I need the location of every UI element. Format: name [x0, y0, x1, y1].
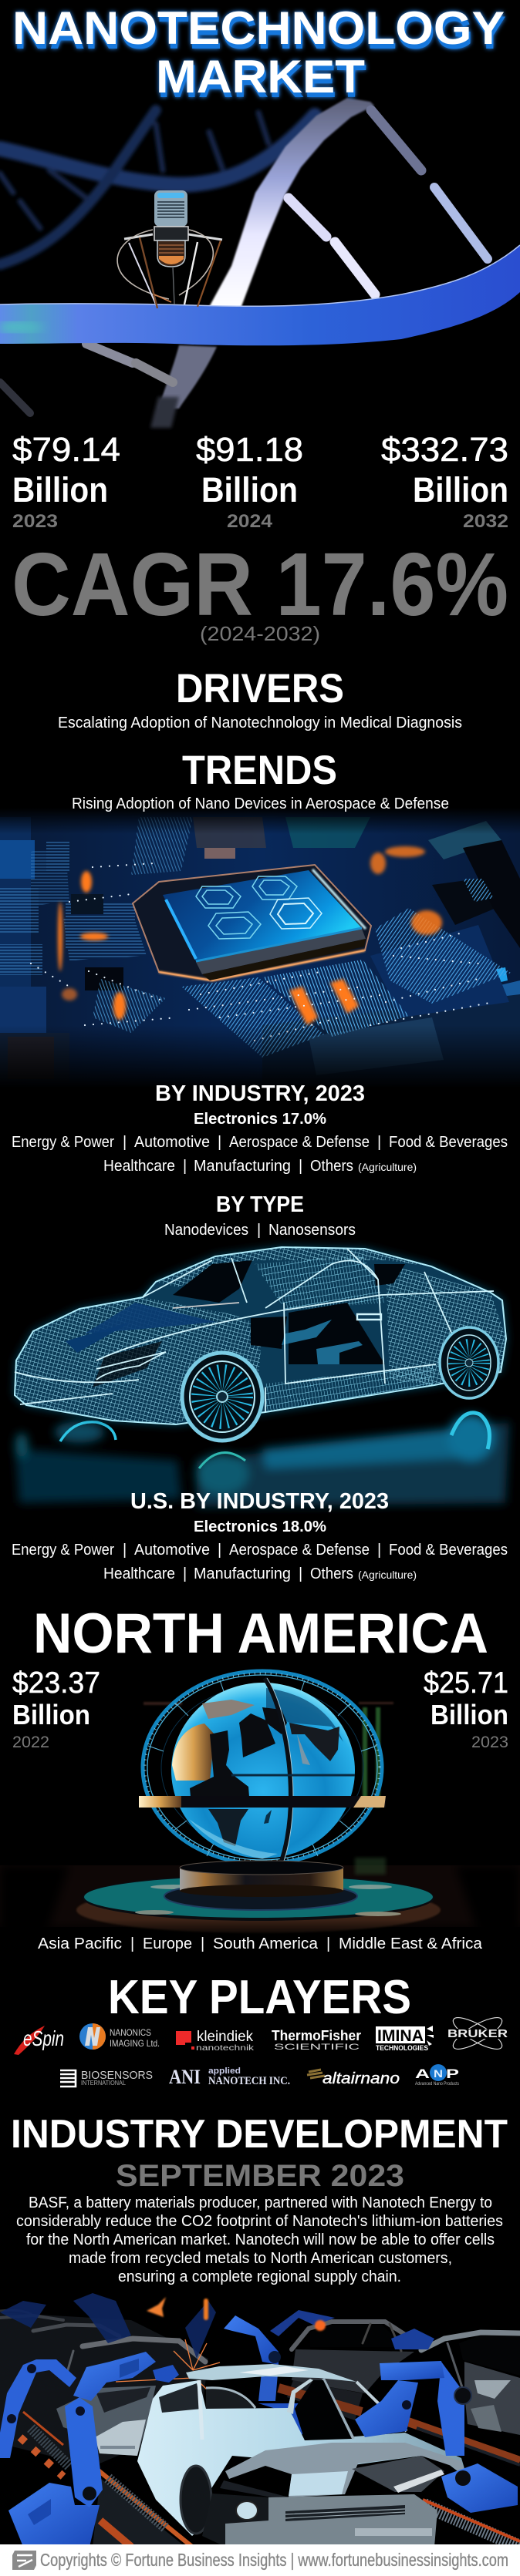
stat 2032 — [381, 431, 508, 532]
logo: eSpin — [14, 2026, 64, 2055]
U.S. industry segments: | — [218, 1542, 221, 1559]
stat 2024: 2024 — [227, 511, 273, 532]
stat 2032: $332.73 — [381, 431, 508, 469]
car seats — [282, 1320, 363, 1364]
development description: made from recycled metals to North American customers, — [69, 2250, 452, 2267]
rear wheel — [440, 1327, 498, 1398]
gold lit land — [172, 1723, 214, 1781]
industry segments: | — [183, 1158, 187, 1175]
logo: kleindiek: nanotechnik — [196, 2044, 255, 2053]
logo: Thermo Fisher: SCIENTIFIC — [274, 2043, 360, 2052]
U.S. industry segments: Manufacturing — [194, 1565, 291, 1582]
globe image — [0, 1671, 520, 1938]
U.S. industry segments: | — [377, 1542, 381, 1559]
lavender strand — [208, 98, 374, 308]
rails — [20, 2388, 520, 2547]
U.S. industry segments: Healthcare — [103, 1565, 175, 1582]
industry segments: Healthcare — [103, 1158, 175, 1175]
logo: Nanonics: NANONICS — [110, 2027, 151, 2038]
key player logos — [14, 2012, 509, 2088]
car roof and pillars — [186, 2364, 407, 2440]
development description: for the North American market. Nanotech will now be able to offer cells — [26, 2231, 495, 2248]
trends — [72, 748, 449, 812]
lower strand fading — [158, 345, 217, 409]
other regions: Middle East & Africa — [339, 1935, 483, 1952]
logo: Applied Nanotech: ANI — [169, 2066, 201, 2088]
North America value 2022: 2022 — [12, 1734, 49, 1751]
reflection — [15, 1414, 509, 1507]
stat 2024: Billion — [201, 470, 298, 509]
by industry 2023: Electronics 17.0% — [194, 1111, 326, 1128]
logo: ANP: A — [415, 2067, 430, 2081]
logo: Applied Nanotech: NANOTECH INC. — [208, 2075, 290, 2087]
by type: BY TYPE — [216, 1192, 304, 1217]
by type: | — [257, 1222, 261, 1239]
logo: Nanonics — [79, 2023, 160, 2050]
dim background data panels — [144, 1702, 393, 1808]
industry segments: Manufacturing — [194, 1158, 291, 1175]
by type: Nanodevices — [164, 1222, 248, 1239]
circuit trace fields — [31, 817, 511, 1058]
North America value 2023: 2023 — [471, 1734, 508, 1751]
North America value 2023 — [424, 1666, 508, 1751]
logo: ANP — [415, 2064, 459, 2087]
development description — [16, 2194, 503, 2285]
stat 2024 — [196, 431, 303, 532]
logo: Fortune Business Insights — [12, 2551, 36, 2570]
U.S. industry segments: (Agriculture) — [358, 1569, 417, 1581]
pedestal — [164, 1882, 357, 1910]
chip image — [0, 808, 520, 1088]
logo: Applied Nanotech: applied — [208, 2067, 241, 2076]
by type: Nanosensors — [268, 1222, 356, 1239]
rungs — [0, 110, 488, 413]
industry segments: Aerospace & Defense — [229, 1134, 370, 1151]
sphere — [171, 1683, 355, 1858]
sparks — [147, 2297, 326, 2331]
car body — [15, 1247, 506, 1424]
development description: considerably reduce the CO2 footprint of Nanotech's lithium-ion batteries — [16, 2213, 503, 2230]
wheel arch — [181, 2466, 211, 2534]
other regions: Asia Pacific — [38, 1935, 122, 1952]
horizontal glow line — [143, 1777, 382, 1779]
North America value 2022 — [12, 1666, 100, 1751]
nano robot — [117, 190, 222, 308]
front wheel — [182, 1353, 262, 1441]
car dark openings — [66, 1260, 405, 1387]
industry segments: Others — [310, 1158, 353, 1175]
hero image: DNA strand with nano robot — [0, 98, 520, 428]
logo: Biosensors: INTERNATIONAL — [81, 2080, 126, 2087]
logo: Bruker: BRUKER — [447, 2027, 508, 2040]
continents — [190, 1707, 339, 1846]
U.S. industry segments: Food & Beverages — [389, 1542, 508, 1559]
logo: kleindiek — [176, 2029, 255, 2053]
platform — [76, 1887, 441, 1933]
background cars — [0, 2310, 520, 2467]
logo: Applied Nanotech — [169, 2066, 290, 2088]
industry development heading: INDUSTRY DEVELOPMENT — [11, 2112, 508, 2157]
development description: BASF, a battery materials producer, partnered with Nanotech Energy to — [29, 2194, 492, 2211]
chip octagons — [196, 876, 322, 939]
other regions: South America — [213, 1935, 319, 1952]
North America value 2023: $25.71 — [424, 1666, 508, 1700]
industry segments: | — [123, 1134, 127, 1151]
logo: Biosensors — [60, 2069, 153, 2087]
drivers: Escalating Adoption of Nanotechnology in Medical Diagnosis — [58, 715, 462, 731]
logo: Bruker — [446, 2012, 509, 2055]
second car shell — [56, 2386, 255, 2456]
logo: Thermo Fisher — [272, 2028, 361, 2052]
market size stats — [12, 431, 508, 532]
other regions: | — [130, 1935, 134, 1952]
U.S. industry segments — [12, 1542, 508, 1582]
industry segments: (Agriculture) — [358, 1161, 417, 1173]
North America value 2022: $23.37 — [12, 1666, 100, 1700]
outer ring — [143, 1671, 382, 1864]
industry segments: | — [299, 1158, 302, 1175]
logo: Altairnano: altairnano — [322, 2070, 400, 2087]
North America value 2022: Billion — [12, 1699, 90, 1730]
industry segments — [12, 1134, 508, 1175]
orange glows — [58, 846, 442, 1025]
U.S. by industry 2023: Electronics 18.0% — [194, 1518, 326, 1535]
board components — [0, 817, 520, 1082]
title: MARKET — [156, 51, 365, 103]
U.S. industry segments: Energy & Power — [12, 1542, 114, 1559]
logo: Nanonics: IMAGING Ltd. — [110, 2038, 160, 2049]
logo: Imina — [376, 2026, 434, 2053]
blue main strand — [0, 245, 520, 345]
blue robots back — [0, 2293, 434, 2435]
logo: ANP: Advanced Nano Products — [415, 2082, 459, 2087]
drivers — [58, 666, 462, 731]
title: NANOTECHNOLOGY — [12, 2, 505, 54]
front bumper — [202, 2494, 437, 2547]
logo: Biosensors: BIOSENSORS — [81, 2069, 153, 2082]
logo: ANP: P — [446, 2067, 459, 2081]
trends: TRENDS — [182, 748, 337, 793]
industry segments: Energy & Power — [12, 1134, 114, 1151]
factory image — [0, 2293, 520, 2547]
stat 2023: $79.14 — [12, 431, 120, 469]
other regions: | — [326, 1935, 330, 1952]
stat 2032: Billion — [413, 470, 508, 509]
chip outer frame — [133, 865, 371, 980]
outer glow — [15, 1247, 506, 1424]
other regions — [38, 1935, 483, 1952]
U.S. industry segments: Others — [310, 1565, 353, 1582]
logo: kleindiek: kleindiek — [197, 2029, 253, 2045]
vertical meridian ring — [265, 1678, 291, 1871]
key players heading: KEY PLAYERS — [108, 1971, 411, 2024]
by industry 2023 — [12, 1081, 508, 1175]
U.S. industry segments: | — [299, 1565, 302, 1582]
logo: Thermo Fisher: ThermoFisher — [272, 2028, 361, 2043]
logo: ANP: N — [434, 2067, 443, 2080]
logo: Imina: TECHNOLOGIES — [376, 2044, 428, 2053]
solder dots — [31, 863, 494, 1041]
U.S. industry segments: | — [183, 1565, 187, 1582]
window opening — [159, 2383, 202, 2413]
trends: Rising Adoption of Nano Devices in Aerospace & Defense — [72, 795, 449, 812]
U.S. industry segments: | — [123, 1542, 127, 1559]
footer band — [0, 2544, 520, 2576]
car wire texture — [15, 1297, 262, 1424]
industry segments: Food & Beverages — [389, 1134, 508, 1151]
stat 2023: 2023 — [12, 511, 58, 532]
wireframe car image — [15, 1247, 509, 1507]
CAGR: (2024-2032) — [200, 622, 320, 645]
logo: Imina: IMINA — [377, 2027, 424, 2045]
stat 2023 — [12, 431, 120, 532]
development description: ensuring a complete regional supply chain. — [118, 2268, 401, 2285]
industry segments: Automotive — [134, 1134, 210, 1151]
main car body — [137, 2380, 468, 2536]
industry segments: | — [377, 1134, 381, 1151]
logo: eSpin: eSpin — [23, 2026, 64, 2050]
U.S. by industry 2023 — [12, 1489, 508, 1582]
other regions: | — [201, 1935, 204, 1952]
stat 2024: $91.18 — [196, 431, 303, 469]
chip face — [163, 870, 362, 961]
gold band — [139, 1796, 386, 1808]
car body lines — [15, 1249, 494, 1412]
far DNA helix — [0, 110, 315, 264]
north america heading: NORTH AMERICA — [33, 1602, 488, 1665]
by type — [164, 1192, 356, 1239]
date: SEPTEMBER 2023 — [116, 2159, 404, 2193]
other regions: Europe — [143, 1935, 192, 1952]
U.S. industry segments: Aerospace & Defense — [229, 1542, 370, 1559]
industry segments: | — [218, 1134, 221, 1151]
stat 2023: Billion — [12, 470, 108, 509]
stat 2032: 2032 — [463, 511, 508, 532]
title — [12, 2, 505, 103]
U.S. industry segments: Automotive — [134, 1542, 210, 1559]
blue robots front — [0, 2352, 518, 2547]
U.S. by industry 2023: U.S. BY INDUSTRY, 2023 — [130, 1489, 389, 1514]
by industry 2023: BY INDUSTRY, 2023 — [155, 1081, 365, 1106]
drivers: DRIVERS — [176, 666, 344, 711]
North America value 2023: Billion — [431, 1699, 508, 1730]
hood and engine bay — [220, 2443, 468, 2500]
